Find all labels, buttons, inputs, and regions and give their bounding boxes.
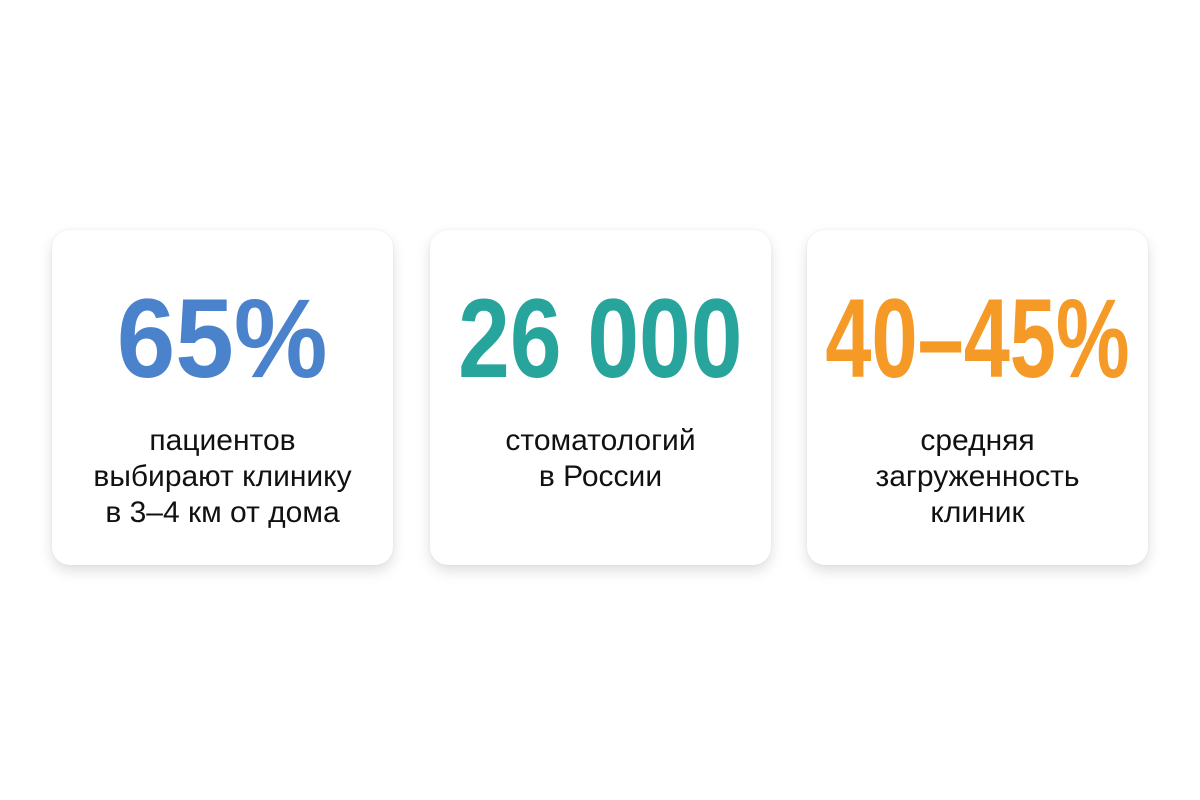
text: clinics	[505, 424, 696, 493]
panel: clinics	[430, 230, 771, 565]
text: clinics: стоматологий	[505, 424, 696, 457]
stat: 65%: 65%	[117, 276, 328, 401]
text: patients: пациентов	[149, 424, 296, 457]
text: load	[875, 424, 1080, 529]
text: load: клиник	[930, 496, 1025, 529]
stat: 40–45%: 40–45%	[825, 276, 1130, 401]
text: patients: выбирают клинику	[93, 460, 352, 493]
text: load: загруженность	[875, 460, 1080, 493]
stat: 26 000: 26 000	[458, 276, 743, 401]
panel: load	[807, 230, 1148, 565]
text: load: средняя	[920, 424, 1035, 457]
text: patients	[93, 424, 352, 529]
panel: patients	[52, 230, 393, 565]
text: patients: в 3–4 км от дома	[105, 496, 340, 529]
text: clinics: в России	[539, 460, 662, 493]
